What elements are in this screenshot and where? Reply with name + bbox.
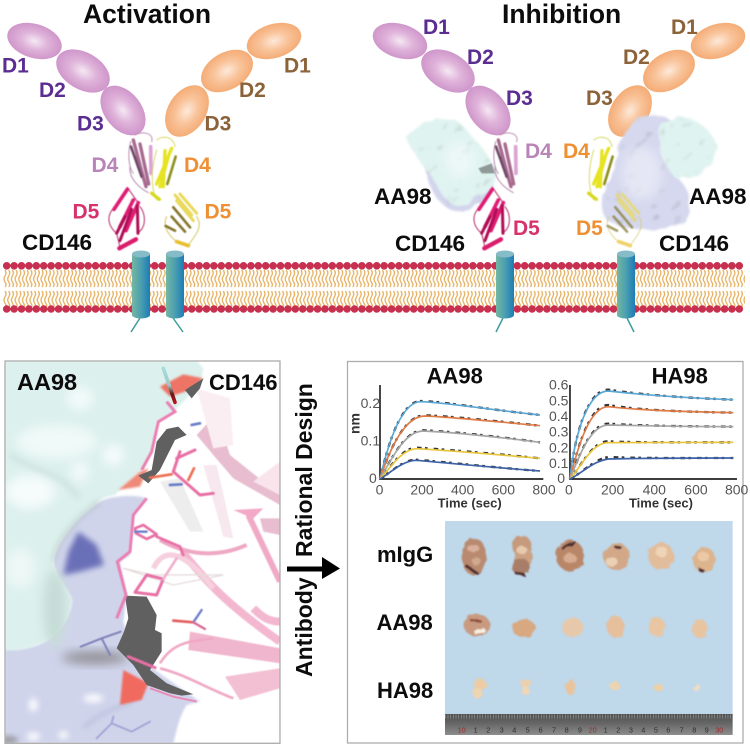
ruler: 8 xyxy=(565,726,569,735)
lavender antibody surface xyxy=(5,496,200,743)
chart: AA98 binding curves: Time (sec) xyxy=(438,496,502,511)
antibody surface: AA98 left xyxy=(406,119,498,212)
ruler: 7 xyxy=(552,726,556,735)
label: AA98 in structure panel: AA98 xyxy=(17,369,77,395)
activation: domain labels: D4 xyxy=(184,154,211,177)
chart: HA98 binding curves: 0.4 xyxy=(549,408,569,424)
ruler: 6 xyxy=(666,726,670,735)
chart: AA98 binding curves xyxy=(347,363,556,511)
ruler: 2 xyxy=(486,726,490,735)
surface highlights and shading xyxy=(0,387,133,744)
ruler: 9 xyxy=(578,726,582,735)
ruler: 7 xyxy=(680,726,684,735)
inhibition: domain labels: D5 xyxy=(576,217,603,240)
chart: AA98 binding curves: 0.1 xyxy=(361,433,380,449)
chart: HA98 binding curves: HA98 xyxy=(652,363,708,388)
row labels: tumour groups: mIgG xyxy=(377,542,433,567)
activation: domain labels: D3 xyxy=(77,112,104,136)
pink interface edge xyxy=(117,402,175,618)
chart: AA98 binding curves: 0 xyxy=(369,470,377,486)
activation: domain labels xyxy=(2,55,311,224)
chart: AA98 binding curves: 200 xyxy=(410,481,434,497)
panel: results frame xyxy=(348,362,743,743)
chart: HA98 binding curves: 0.1 xyxy=(549,455,569,471)
chart: AA98 binding curves: 800 xyxy=(532,481,556,497)
chart: HA98 binding curves: Time (sec) xyxy=(629,496,693,511)
chart: HA98 binding curves: 0.5 xyxy=(549,392,569,408)
CD146 pale ribbons xyxy=(123,388,280,700)
ruler: 8 xyxy=(692,726,696,735)
ruler xyxy=(445,714,733,735)
ruler: 4 xyxy=(512,726,516,735)
chart: HA98 binding curves: 800 xyxy=(725,481,749,497)
antibody surface: AA98 right xyxy=(602,114,718,230)
ruler: 3 xyxy=(500,726,504,735)
inhibition: domain labels xyxy=(423,16,698,240)
activation: domain labels: D4 xyxy=(92,154,119,177)
dark cut surface patches xyxy=(117,378,203,696)
tumours row: AA98 xyxy=(464,614,708,638)
ruler: 1 xyxy=(474,726,478,735)
inhibition: right ribbon domain D4 xyxy=(589,137,613,200)
chart: HA98 binding curves: 0 xyxy=(557,470,565,486)
ruler: 6 xyxy=(539,726,543,735)
blue and red surface patches xyxy=(63,374,203,705)
chart: AA98 binding curves: 0 xyxy=(376,481,384,497)
inhibition: AA98 and CD146 labels: CD146 xyxy=(659,231,729,256)
ruler: 3 xyxy=(629,726,633,735)
chart: HA98 binding curves xyxy=(549,363,749,511)
chart: HA98 binding curves: 0.3 xyxy=(549,424,569,440)
label: CD146 in structure panel: CD146 xyxy=(209,370,277,395)
activation: domain labels: D3 xyxy=(204,112,231,136)
inhibition: AA98 and CD146 labels: CD146 xyxy=(395,231,465,256)
inhibition: domain labels: D4 xyxy=(525,140,552,163)
activation: domain labels: D1 xyxy=(284,55,311,78)
chart: HA98 binding curves: 200 xyxy=(601,481,625,497)
inhibition: domain labels: D1 xyxy=(671,16,698,39)
tumours row: HA98 xyxy=(473,678,700,698)
activation: domain labels: D1 xyxy=(2,55,29,78)
inhibition: AA98 and CD146 labels: AA98 xyxy=(689,184,747,209)
activation: ribbon domains D4 and D5 xyxy=(109,133,199,248)
tumours row: mIgG xyxy=(462,536,716,575)
row labels: tumour groups xyxy=(376,542,433,703)
vertical label: Rational Design: Rational Design xyxy=(291,383,317,557)
chart: AA98 binding curves: 0.2 xyxy=(361,395,380,411)
inhibition: right CD146 domains D1-D3 xyxy=(599,17,750,145)
activation: domain labels: D5 xyxy=(72,200,100,224)
inhibition: AA98 and CD146 labels: AA98 xyxy=(374,184,432,209)
chart: AA98 binding curves: 400 xyxy=(451,481,475,497)
inhibition: domain labels: D3 xyxy=(586,87,613,110)
inhibition: domain labels: D4 xyxy=(563,140,590,163)
chart: HA98 binding curves: 600 xyxy=(684,481,708,497)
activation: domain labels: D2 xyxy=(239,79,266,102)
inhibition: left CD146 domains D1-D3 xyxy=(368,17,520,144)
activation: right CD146 domains D1-D3 xyxy=(156,17,306,145)
chart: AA98 binding curves: nm xyxy=(347,413,363,434)
ruler: 2 xyxy=(616,726,620,735)
residue sticks xyxy=(81,423,213,738)
arrow: antibody design xyxy=(287,557,340,579)
activation: domain labels: D5 xyxy=(204,200,232,224)
activation: domain labels: D2 xyxy=(39,79,66,102)
chart: HA98 binding curves: 400 xyxy=(643,481,666,497)
inhibition: AA98 and CD146 labels xyxy=(374,184,747,256)
inhibition: domain labels: D2 xyxy=(467,46,494,69)
activation: CD146 label: CD146 xyxy=(22,230,92,255)
ruler: 20 xyxy=(589,726,597,735)
activation: left CD146 domains D1-D3 xyxy=(3,17,155,144)
ruler: 10 xyxy=(458,726,466,735)
ruler: 1 xyxy=(604,726,608,735)
ruler: 9 xyxy=(705,726,709,735)
ruler: 30 xyxy=(715,726,723,735)
chart: AA98 binding curves: AA98 xyxy=(427,363,483,388)
inhibition: left ribbon domains D4 and D5 xyxy=(474,133,517,248)
vertical label: Antibody: Antibody xyxy=(291,577,317,677)
chart: HA98 binding curves: 0.2 xyxy=(549,439,569,455)
inhibition: domain labels: D5 xyxy=(513,217,540,240)
photo: excised tumours on blue background xyxy=(445,521,733,735)
chart: HA98 binding curves: 0.6 xyxy=(549,377,569,393)
ruler: 4 xyxy=(641,726,645,735)
ruler: 5 xyxy=(526,726,530,735)
row labels: tumour groups: HA98 xyxy=(377,678,433,703)
transmembrane cylinders xyxy=(131,250,635,332)
inhibition: right ribbon domain D5 xyxy=(607,194,641,246)
panel: binding interface structure xyxy=(0,361,280,744)
inhibition: domain labels: D2 xyxy=(623,46,650,69)
row labels: tumour groups: AA98 xyxy=(376,610,433,635)
inhibition: domain labels: D3 xyxy=(506,87,533,110)
cyan antibody surface xyxy=(5,361,203,650)
ruler: 5 xyxy=(654,726,658,735)
membrane xyxy=(3,266,745,309)
chart: AA98 binding curves: 600 xyxy=(492,481,515,497)
inhibition: domain labels: D1 xyxy=(423,16,450,39)
chart: HA98 binding curves: 0 xyxy=(565,481,573,497)
